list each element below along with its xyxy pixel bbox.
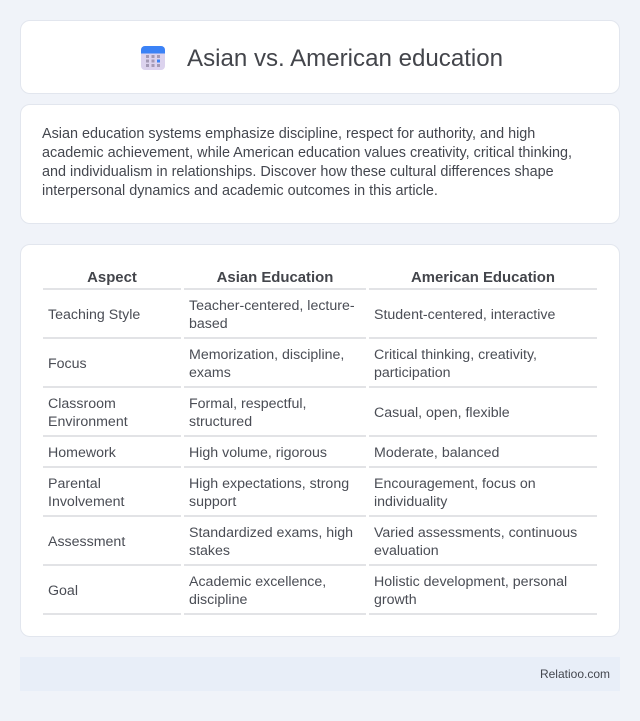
row: parental involvement: support	[189, 494, 236, 510]
icon: calendar	[141, 46, 165, 70]
row: goal: Goal	[48, 583, 78, 599]
table header: Asian Education	[217, 270, 333, 286]
row: focus: exams	[189, 365, 231, 381]
row: focus	[48, 347, 537, 381]
row: focus: participation	[374, 365, 451, 381]
intro text: academic achievement, while American education values creativity, critical thinking,	[42, 145, 572, 161]
row: parental involvement: High expectations, strong	[189, 476, 349, 492]
row: goal: Holistic development, personal	[374, 574, 567, 590]
panel: introduction	[20, 104, 620, 224]
table header	[87, 270, 555, 286]
row: goal	[48, 574, 567, 608]
table header: Aspect	[87, 270, 137, 286]
row: homework: Moderate, balanced	[374, 445, 499, 461]
intro text: and individualism in relationships. Discover how these cultural differences shape	[42, 164, 554, 180]
row: focus: Memorization, discipline,	[189, 347, 344, 363]
row: teaching style: Teacher-centered, lecture-	[189, 298, 355, 314]
panel: header	[20, 20, 620, 94]
title: Asian vs. American education	[187, 45, 503, 72]
table header: American Education	[411, 270, 555, 286]
row: goal: growth	[374, 592, 417, 608]
row: classroom environment: Classroom	[48, 396, 116, 412]
row: parental involvement: Encouragement, focus on	[374, 476, 536, 492]
row: focus: Critical thinking, creativity,	[374, 347, 537, 363]
panel: comparison table	[20, 244, 620, 637]
row: teaching style: Teaching Style	[48, 307, 140, 323]
row: goal: discipline	[189, 592, 247, 608]
row: assessment: evaluation	[374, 543, 439, 559]
row: parental involvement: individuality	[374, 494, 447, 510]
row: focus: Focus	[48, 356, 87, 372]
footer	[20, 657, 620, 691]
intro text: interpersonal dynamics and academic outcomes in this article.	[42, 183, 438, 199]
row: teaching style: based	[189, 316, 228, 332]
row: assessment	[48, 525, 577, 559]
row: teaching style: Student-centered, interactive	[374, 307, 555, 323]
row: homework	[48, 445, 499, 461]
row: parental involvement: Involvement	[48, 494, 124, 510]
intro text: Asian education systems emphasize discipline, respect for authority, and high	[42, 126, 535, 142]
table	[43, 270, 597, 615]
row: parental involvement: Parental	[48, 476, 101, 492]
row: assessment: Varied assessments, continuous	[374, 525, 577, 541]
row: goal: Academic excellence,	[189, 574, 326, 590]
row: parental involvement	[48, 476, 536, 510]
row: homework: High volume, rigorous	[189, 445, 327, 461]
row: classroom environment: Casual, open, flexible	[374, 405, 510, 421]
footer credit: Relatioo.com	[540, 667, 610, 681]
row: assessment: Assessment	[48, 534, 125, 550]
row: homework: Homework	[48, 445, 116, 461]
row: classroom environment	[48, 396, 510, 430]
row: classroom environment: Formal, respectful,	[189, 396, 306, 412]
row: teaching style	[48, 298, 555, 332]
row: classroom environment: Environment	[48, 414, 128, 430]
row: classroom environment: structured	[189, 414, 252, 430]
row: assessment: stakes	[189, 543, 230, 559]
intro text	[42, 126, 572, 199]
row: assessment: Standardized exams, high	[189, 525, 353, 541]
